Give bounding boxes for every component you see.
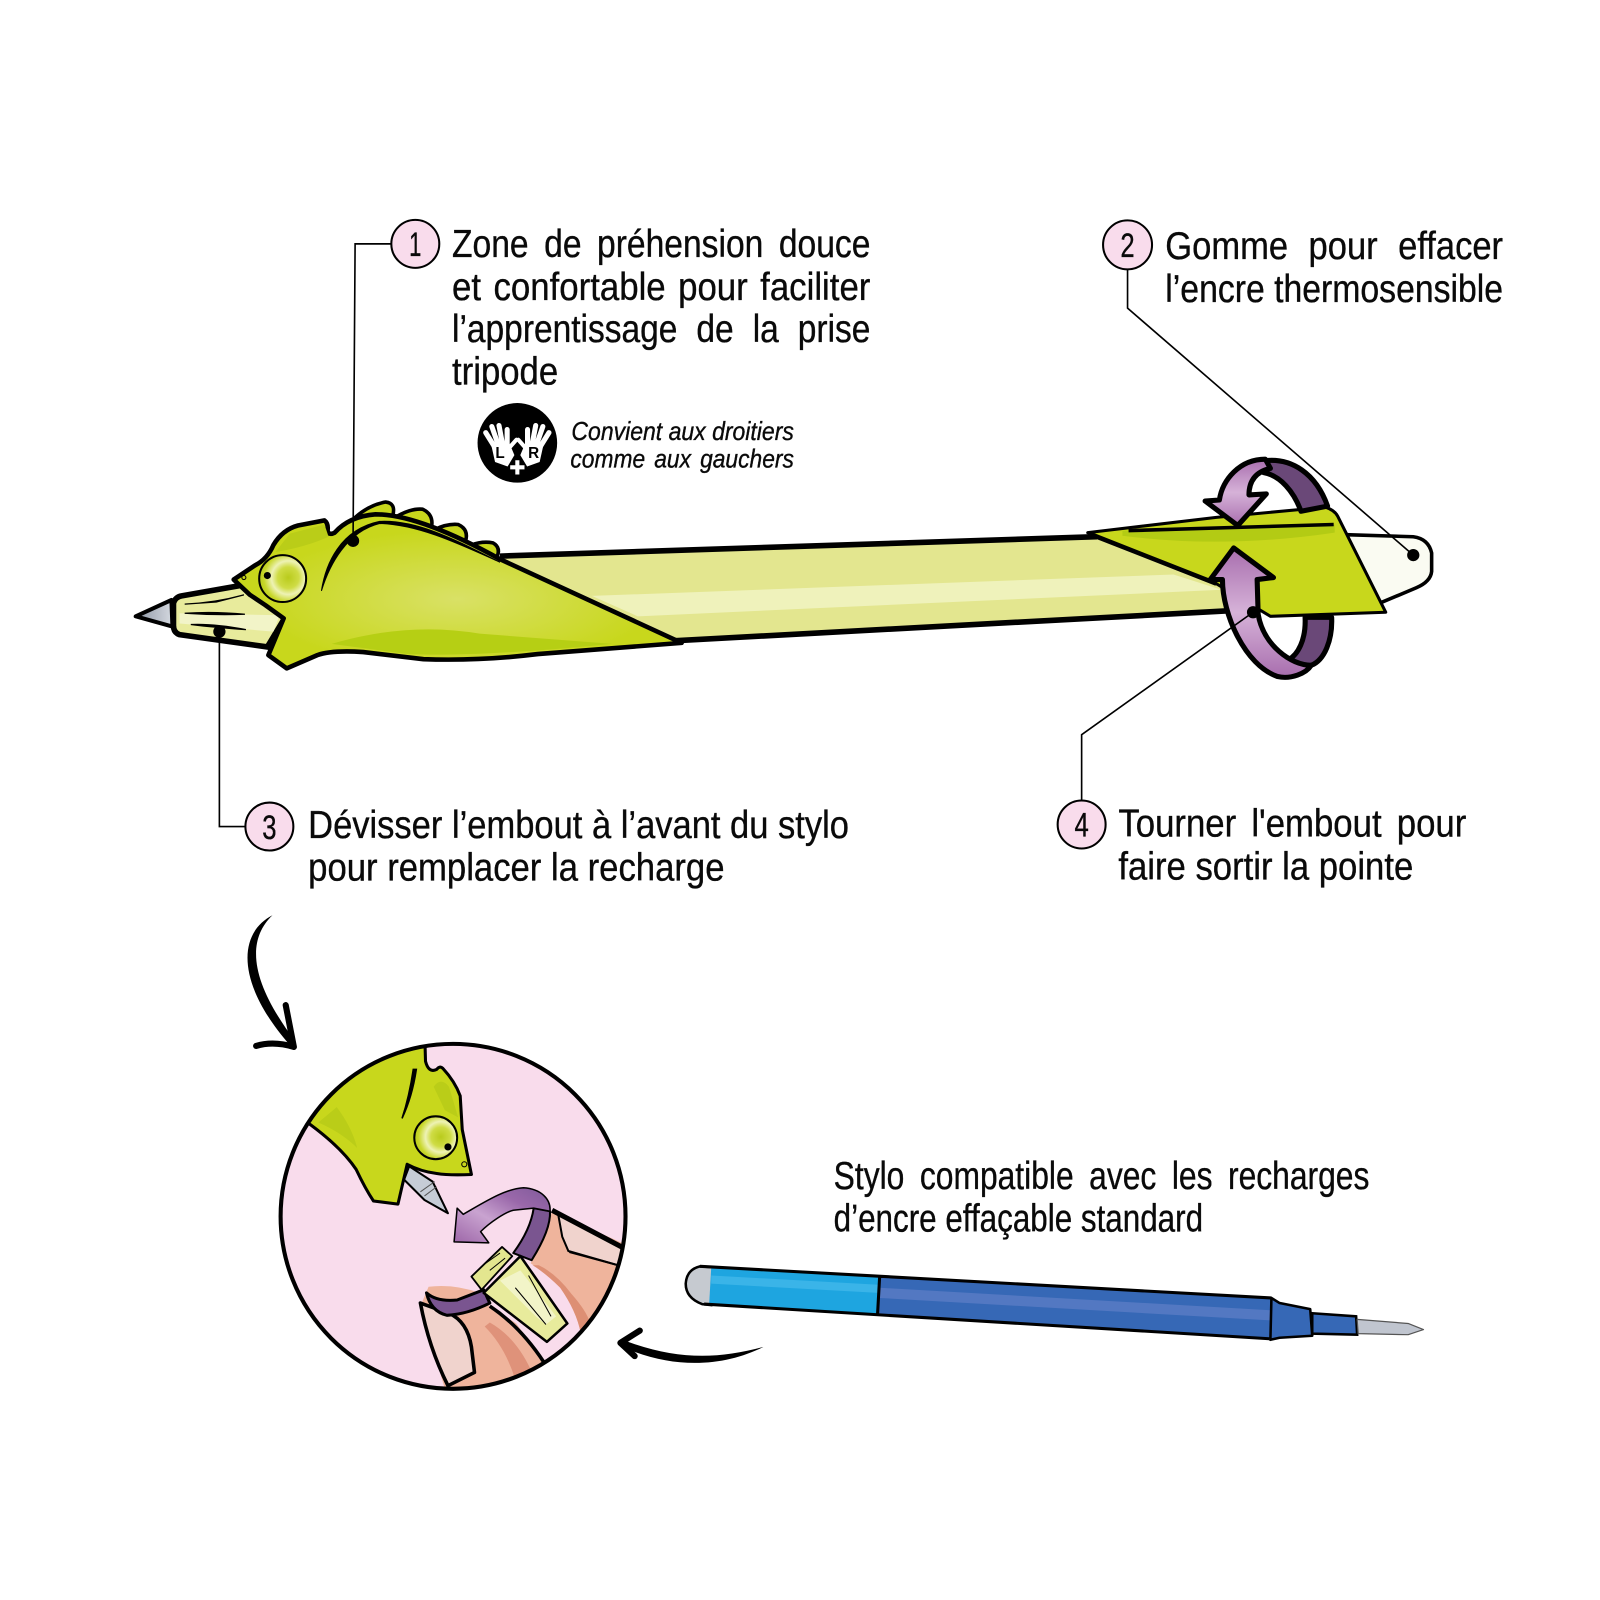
callout 4	[1058, 801, 1466, 889]
text 2: l’encre thermosensible	[1165, 268, 1503, 311]
chameleon head grip	[234, 514, 682, 668]
text 3: pour remplacer la recharge	[308, 847, 724, 890]
text 2	[1165, 225, 1503, 311]
leader dot 4	[1247, 606, 1259, 618]
note: left and right handed: Convient aux droitiers	[571, 418, 794, 446]
pen tip	[136, 600, 172, 627]
text 1: l’apprentissage de la prise	[452, 308, 870, 351]
chameleon spikes	[352, 502, 498, 559]
callout 2	[1103, 220, 1503, 311]
eraser end	[1346, 535, 1432, 604]
text 4: faire sortir la pointe	[1118, 846, 1413, 889]
chameleon eye	[259, 555, 306, 602]
leader dot 2	[1407, 549, 1419, 561]
arrow: from refill to detail circle	[620, 1331, 763, 1363]
illustration: ink refill	[686, 1266, 1423, 1340]
badge 2: 2	[1120, 227, 1135, 265]
panel: detail circle	[281, 1026, 638, 1396]
badge 3: 3	[262, 809, 277, 847]
refill tip in detail	[404, 1166, 448, 1213]
badge 1: 1	[409, 226, 421, 264]
leader line 2	[1128, 269, 1413, 555]
finger top	[530, 1208, 622, 1330]
text 4: Tourner l'embout pour	[1118, 803, 1466, 846]
leader dot 1	[347, 535, 359, 547]
arrow: from callout 3 to detail circle	[248, 915, 295, 1047]
caption: compatible refills	[834, 1155, 1369, 1241]
text 1: Zone de préhension douce	[452, 223, 870, 266]
icon: left and right hands	[478, 403, 557, 483]
leader dot 3	[213, 626, 226, 638]
finger bottom	[420, 1286, 544, 1396]
front nozzle	[173, 585, 286, 647]
leader line 1	[353, 244, 392, 541]
pen barrel	[500, 533, 1240, 641]
note: left and right handed: comme aux gauchers	[570, 445, 794, 473]
rotation arrow in detail	[427, 1188, 550, 1315]
text 2: Gomme pour effacer	[1165, 225, 1503, 268]
leader line 4	[1082, 612, 1253, 801]
badge 2	[1103, 220, 1152, 269]
caption: compatible refills: d’encre effaçable standard	[834, 1198, 1203, 1241]
text 1	[452, 223, 870, 394]
badge 4: 4	[1074, 807, 1089, 845]
tail grip	[1088, 507, 1386, 616]
text 1: et confortable pour faciliter	[452, 266, 870, 309]
chameleon head in detail	[308, 1048, 473, 1206]
text 3: Dévisser l’embout à l’avant du stylo	[308, 804, 849, 847]
caption: compatible refills: Stylo compatible avec les recharges	[834, 1155, 1369, 1198]
text 4	[1118, 803, 1466, 889]
note: left and right handed	[570, 418, 794, 473]
text 1: tripode	[452, 351, 558, 394]
icon: left and right hands: R	[528, 445, 539, 462]
text 3	[308, 804, 849, 890]
badge 1	[391, 220, 439, 268]
callout 3	[245, 803, 849, 890]
callout 1	[391, 220, 870, 394]
illustration: chameleon pen	[136, 459, 1432, 677]
leader line 3	[219, 632, 246, 827]
icon: left and right hands: L	[495, 445, 505, 462]
yellow nozzle	[471, 1247, 567, 1342]
badge 3	[245, 803, 293, 851]
rotation arrow	[1205, 459, 1332, 677]
badge 4	[1058, 801, 1106, 848]
